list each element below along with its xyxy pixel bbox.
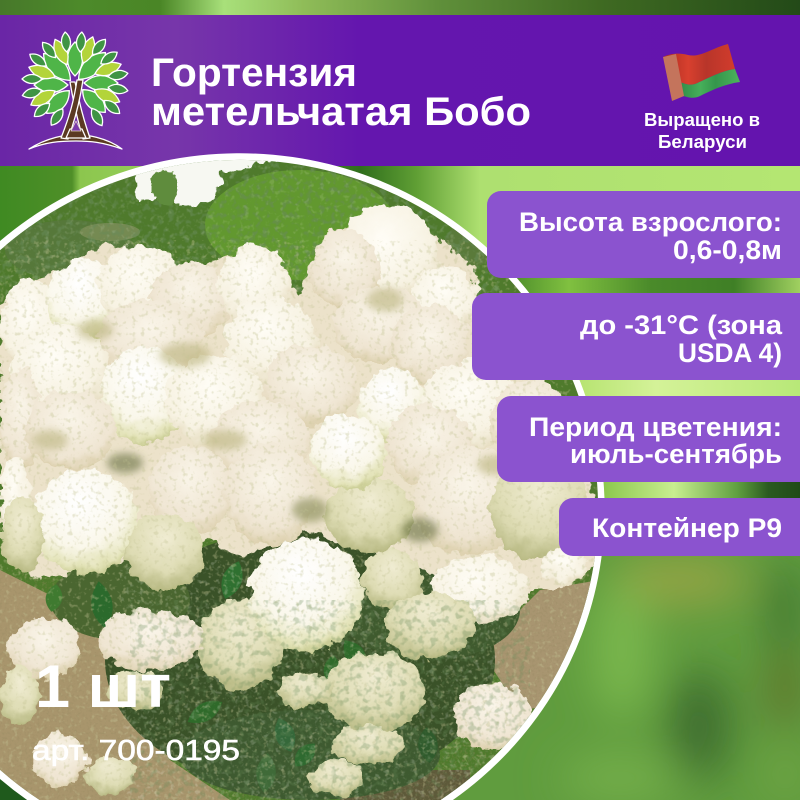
panel: mature height <box>487 191 800 278</box>
panel: flowering period: июль-сентябрь <box>570 439 782 469</box>
sky <box>134 160 278 208</box>
white ring around photo <box>0 153 605 800</box>
flower heads <box>0 205 600 796</box>
panel: mature height: 0,6-0,8м <box>673 235 782 265</box>
soft flower shadows <box>32 288 513 542</box>
panel: flowering period <box>497 396 800 482</box>
icon: Belarus flag <box>663 44 740 101</box>
caption: grown in Belarus: Выращено в <box>644 110 760 130</box>
title: метельчатая Бобо <box>151 90 531 134</box>
caption: grown in Belarus <box>644 110 760 152</box>
panel: frost hardiness: до -31°С (зона <box>580 310 783 340</box>
panel: frost hardiness <box>472 293 800 380</box>
title: Гортензия <box>151 51 357 95</box>
bright round flower head <box>249 538 363 652</box>
header banner <box>0 15 800 166</box>
quantity label: 1 шт <box>35 653 171 720</box>
title <box>151 51 531 134</box>
logo: tree <box>21 32 129 149</box>
lower foliage texture <box>130 600 530 800</box>
panel: frost hardiness: USDA 4) <box>678 338 782 368</box>
soil <box>0 570 600 800</box>
panel: container size: Контейнер Р9 <box>592 513 782 543</box>
leaves <box>21 32 129 128</box>
article number: арт. 700-0195 <box>32 735 240 767</box>
photo: flowering hydrangea bush <box>0 155 600 800</box>
dark foliage under the blooms <box>43 530 520 800</box>
panel: flowering period: Период цветения: <box>529 412 782 442</box>
flower texture <box>0 240 600 800</box>
far foliage <box>0 160 500 310</box>
panel: container size <box>559 498 800 556</box>
caption: grown in Belarus: Беларуси <box>658 132 747 152</box>
panel: mature height: Высота взрослого: <box>519 207 782 237</box>
